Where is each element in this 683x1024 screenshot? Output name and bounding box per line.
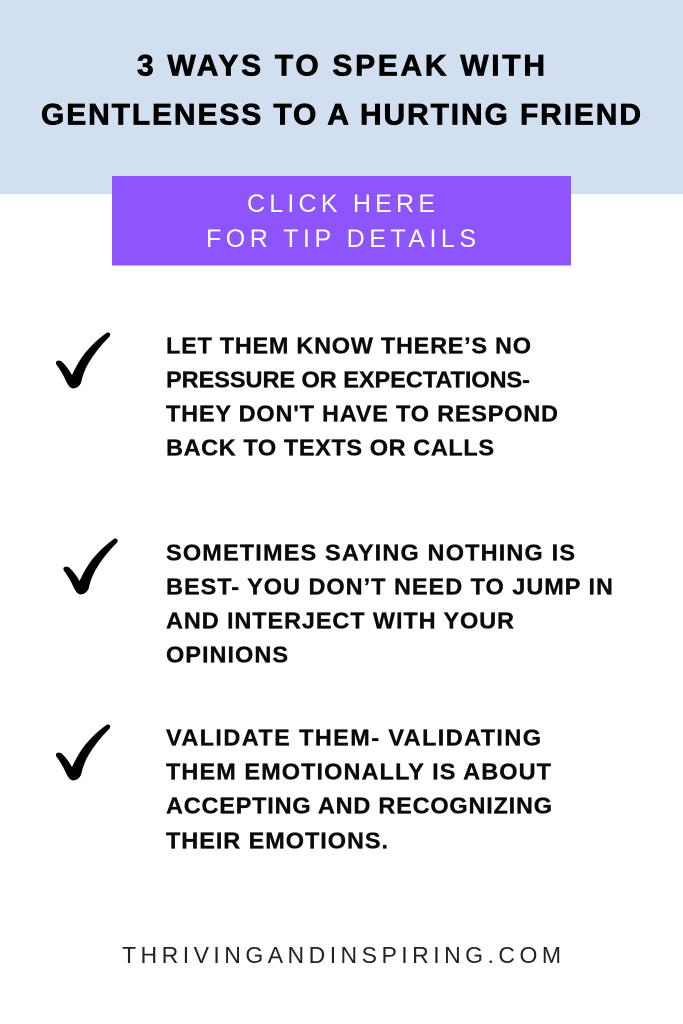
tip 2 text (166, 540, 613, 668)
tip 3 text (166, 724, 552, 854)
title (41, 50, 641, 132)
tip 1 text: BACK TO TEXTS OR CALLS (166, 434, 494, 460)
icon: check mark 2 (64, 538, 118, 594)
call to action button (112, 176, 571, 266)
tip 3 text: THEIR EMOTIONS. (166, 828, 388, 854)
tip 1 text: LET THEM KNOW THERE’S NO (166, 332, 531, 358)
tip 2 text: OPINIONS (166, 642, 288, 668)
tip 2 text: SOMETIMES SAYING NOTHING IS (166, 540, 575, 566)
tip 3 text: THEM EMOTIONALLY IS ABOUT (166, 758, 552, 784)
tip 1 text (166, 332, 558, 460)
icon: check mark 1 (56, 332, 110, 388)
call to action button: CLICK HERE (247, 190, 435, 218)
footer website: THRIVINGANDINSPIRING.COM (122, 942, 561, 968)
header band (0, 0, 683, 194)
tip 2 text: AND INTERJECT WITH YOUR (166, 608, 514, 634)
tip 2 text: BEST- YOU DON’T NEED TO JUMP IN (166, 574, 613, 600)
call to action button: FOR TIP DETAILS (206, 225, 476, 253)
title: GENTLENESS TO A HURTING FRIEND (41, 98, 641, 132)
tip 1 text: PRESSURE OR EXPECTATIONS- (166, 366, 530, 392)
tip 1 text: THEY DON'T HAVE TO RESPOND (166, 400, 558, 426)
tip 3 text: ACCEPTING AND RECOGNIZING (166, 792, 552, 818)
tip 3 text: VALIDATE THEM- VALIDATING (166, 724, 541, 750)
icon: check mark 3 (56, 724, 110, 780)
title: 3 WAYS TO SPEAK WITH (137, 50, 545, 82)
